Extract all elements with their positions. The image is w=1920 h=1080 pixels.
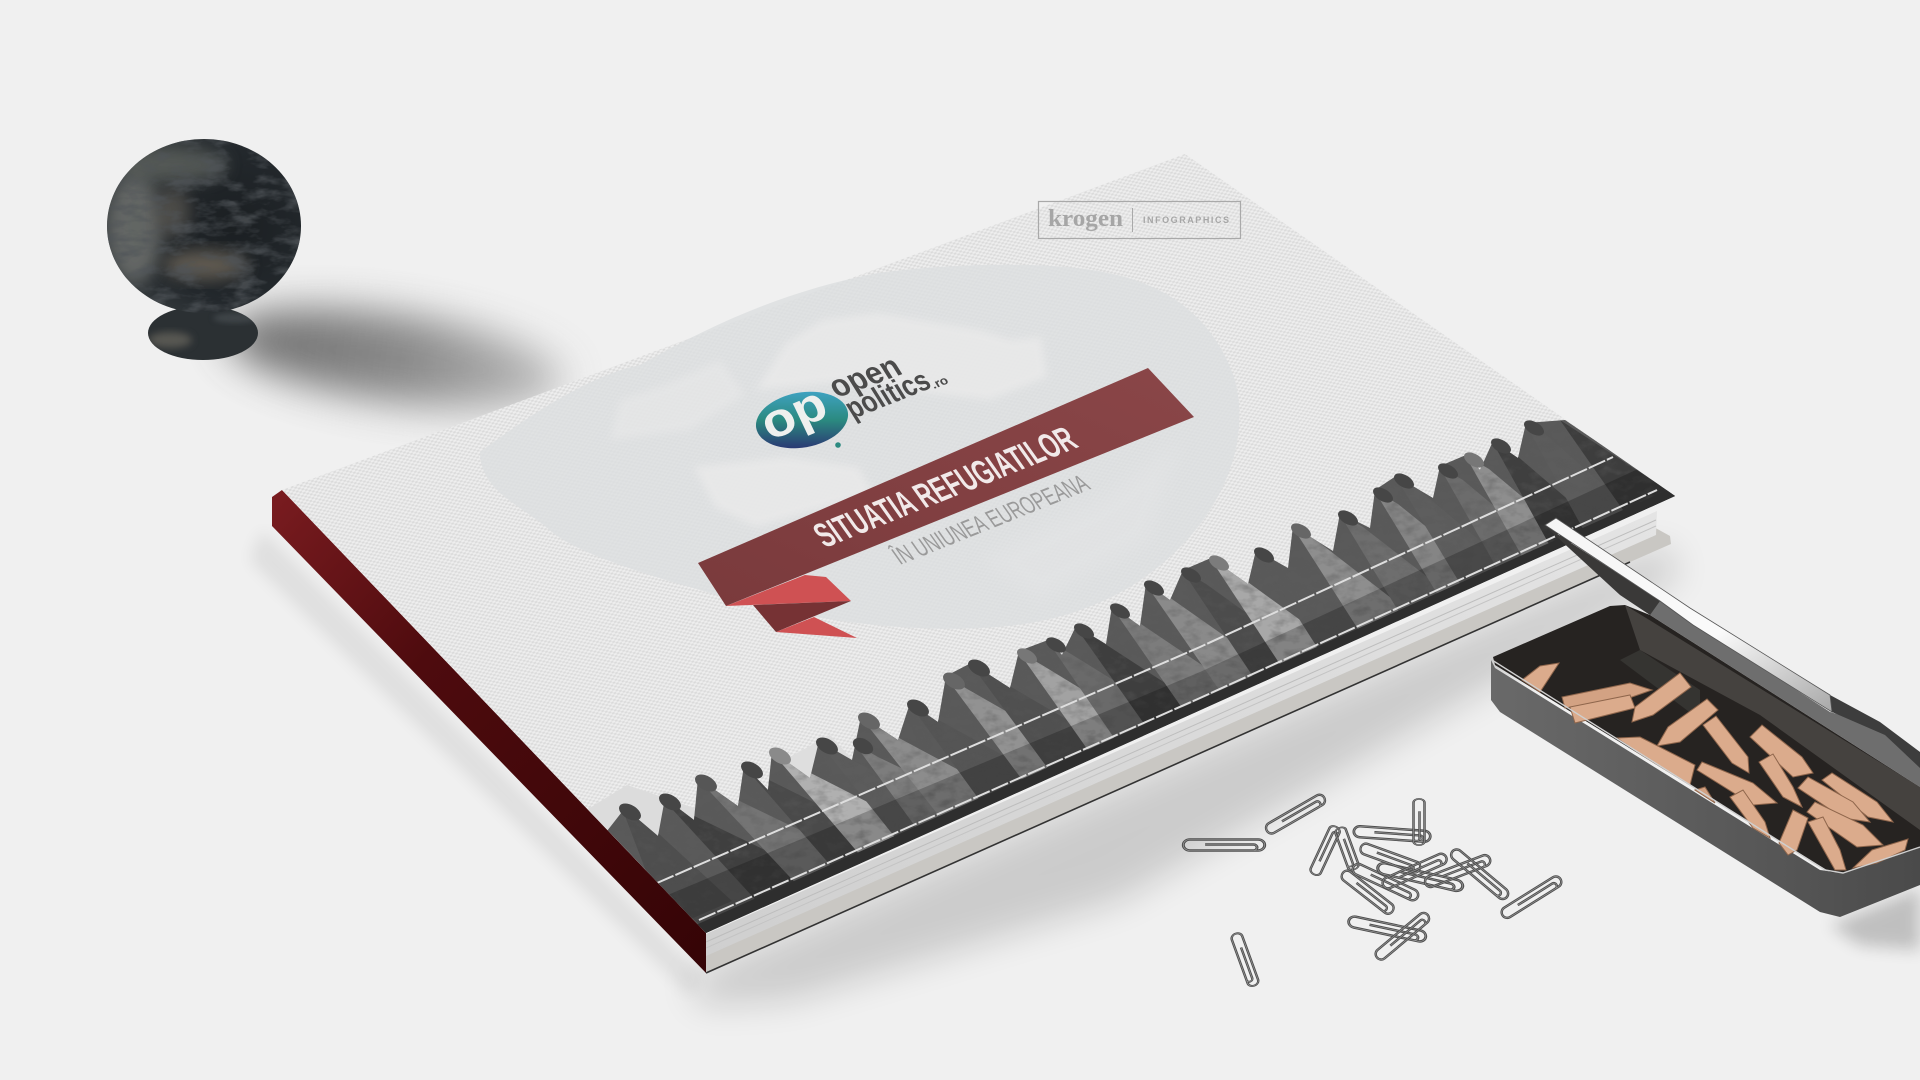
figure hoods — [616, 417, 1547, 824]
ribbon banner — [698, 368, 1194, 606]
logo: open politics — [756, 360, 948, 448]
ribbon lower fold — [776, 617, 857, 638]
book — [272, 154, 1690, 973]
back board — [706, 525, 1671, 973]
krogen infographics badge: INFOGRAPHICS — [1143, 215, 1229, 225]
paperclips — [1183, 793, 1563, 987]
logo suffix: .ro — [928, 374, 951, 391]
background tents — [588, 715, 930, 870]
fence wires — [657, 457, 1657, 920]
lid dark top band — [1830, 695, 1920, 768]
shadow: book — [250, 530, 1680, 1005]
ribbon upper fold — [726, 575, 851, 606]
lid scratched edge — [1650, 601, 1920, 787]
spine — [272, 490, 706, 973]
logo letters: op — [751, 375, 835, 450]
metal tin — [1491, 518, 1920, 917]
title: SITUATIA REFUGIATILOR — [805, 419, 1085, 555]
krogen infographics badge: krogen — [1048, 206, 1123, 232]
pages — [706, 511, 1657, 956]
ribbon — [698, 368, 1194, 638]
tin inner back wall — [1620, 605, 1920, 830]
logo badge — [756, 392, 848, 448]
sphere ornament — [100, 135, 305, 360]
subtitle: ÎN UNIUNEA EUROPEANA — [886, 469, 1095, 570]
refugees photo band — [588, 420, 1675, 933]
shadow: sphere — [221, 291, 569, 425]
logo word politics: politics — [838, 363, 937, 425]
ribbon shaded fold — [753, 601, 851, 632]
sphere base — [148, 306, 258, 360]
tin front rim — [1492, 660, 1920, 873]
figures — [622, 420, 1678, 929]
cover — [282, 154, 1690, 960]
tin interior — [1493, 605, 1920, 873]
lid underside — [1545, 526, 1670, 622]
skirts shade — [620, 468, 1690, 945]
dark edge line — [706, 562, 1630, 973]
ground shade — [698, 490, 1675, 933]
krogen infographics badge — [1038, 202, 1240, 238]
pencils — [1522, 663, 1908, 870]
lid chrome strip — [1545, 518, 1832, 712]
logo dot — [835, 442, 841, 448]
globe — [480, 265, 1239, 629]
photo texture — [680, 437, 1654, 870]
crowd silhouette and figures — [608, 420, 1675, 933]
tin front wall — [1491, 660, 1920, 917]
sphere body — [100, 135, 305, 315]
tin shadow — [1830, 888, 1920, 950]
logo word open: open — [821, 349, 908, 405]
